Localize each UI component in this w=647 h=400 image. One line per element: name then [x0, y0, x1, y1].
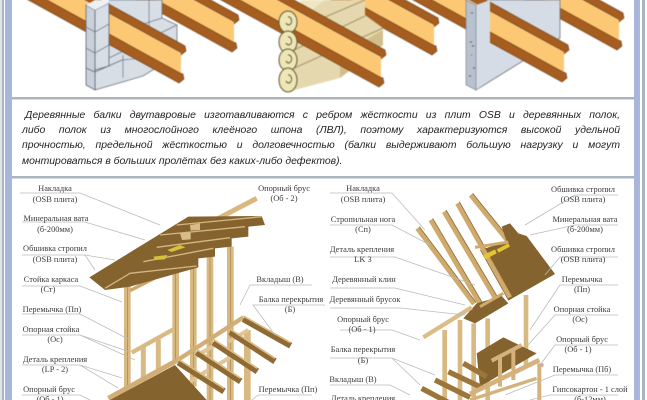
insulation [483, 243, 510, 259]
eave panel [463, 296, 508, 323]
labels: right view, right column: (Ос) [572, 315, 588, 324]
floor sheathing [110, 365, 207, 400]
labels: left view, left column: Накладка [38, 184, 72, 193]
log wall [287, 0, 383, 92]
labels: right view, right column: (Пп) [574, 285, 590, 294]
labels: right view, left column [329, 184, 401, 400]
labels: left view, left column: Минеральная вата [23, 214, 89, 223]
roof sheathing [480, 223, 555, 301]
labels: right view, right column: (б-200мм) [567, 225, 603, 234]
labels: right view, right column: (OSB плита) [561, 195, 606, 204]
floor plates [108, 317, 243, 398]
labels: left view, right column: (Об - 2) [270, 194, 298, 203]
beam through concrete wall [268, 0, 569, 82]
labels: left view, left column [23, 184, 89, 400]
beam behind logs [138, 0, 439, 55]
lower joists [422, 363, 487, 400]
wall posts [445, 295, 526, 400]
labels: left view, right column: Вкладыш (В) [256, 275, 304, 284]
labels: right view, left column: Стропильная нога [331, 215, 396, 224]
labels: left view, left column: (Ос) [47, 335, 63, 344]
beam through block wall [0, 0, 186, 83]
labels: right view, left column: (OSB плита) [341, 195, 386, 204]
upper floor sheathing [477, 337, 537, 387]
labels: left view, right column: Балка перекрытия [259, 295, 323, 304]
labels: left view, right column: Перемычка (Пп) [259, 385, 318, 394]
labels: left view, right column: (Б) [285, 305, 295, 314]
labels: right view, left column: Деревянный клин [332, 275, 396, 284]
labels: left view, left column: (LP - 2) [42, 365, 68, 374]
rafters behind the sheathing [417, 195, 508, 314]
labels: right view, right column: Перемычка (Пб) [553, 365, 611, 374]
log ends [279, 11, 297, 92]
diagram: frame house, right view [417, 193, 555, 400]
labels: left view, right column: Опорный брус [258, 184, 310, 193]
ridge beam [217, 198, 257, 219]
labels: right view, right column [551, 185, 628, 400]
text block: description of I-beams: прочностью, предельной жёсткостью и долговечностью (балки выдерживают большую нагрузку и могут [22, 140, 620, 151]
labels: right view, right column: (OSB плита) [561, 255, 606, 264]
labels: right view, right column: (Об - 1) [564, 345, 592, 354]
text block: description of I-beams: Деревянные балки двутавровые изготавливаются с ребром жёсткости из плит OSB и деревянных полок, [25, 110, 620, 121]
diagram: frame house, left view [89, 198, 291, 400]
leader lines [20, 193, 618, 400]
batten [475, 242, 508, 307]
wall posts [127, 247, 247, 400]
labels: right view, left column: Деталь крепления [330, 245, 394, 254]
labels: right view, left column: Вкладыш (В) [329, 375, 377, 384]
roof sheathing and rafters [89, 216, 265, 290]
beam behind block wall [0, 0, 239, 52]
concrete wall [476, 0, 560, 90]
labels: right view, left column: (Сп) [355, 225, 371, 234]
labels: right view, left column: Опорный брус [337, 315, 389, 324]
block wall [95, 0, 177, 90]
labels: left view, left column: Опорный брус [23, 385, 75, 394]
joist blocking [190, 330, 248, 382]
labels: right view, right column: Минеральная вата [552, 215, 618, 224]
labels: left view, left column: Опорная стойка [23, 325, 80, 334]
edge rafter [457, 202, 512, 297]
labels: left view, right column [256, 184, 323, 394]
top plate [130, 270, 171, 291]
labels: right view, left column: (Б) [358, 356, 368, 365]
labels: left view, left column: (б-200мм) [37, 225, 73, 234]
labels: right view, right column: Опорная стойка [554, 305, 611, 314]
labels: left view, left column: (OSB плита) [33, 195, 78, 204]
beam in front of logs [85, 0, 386, 87]
labels: right view, right column: Перемычка [562, 275, 603, 284]
labels: left view, left column: Перемычка (Пп) [23, 305, 82, 314]
text block: description of I-beams: монтироваться в больших пролётах без каких-либо дефектов). [22, 156, 342, 167]
labels: right view, left column: Накладка [346, 184, 380, 193]
labels: right view, left column: Деревянный брусок [330, 295, 401, 304]
labels: right view, right column: Обшивка стропил [551, 245, 615, 254]
concrete column [466, 0, 490, 90]
labels: left view, left column: Деталь крепления [23, 355, 87, 364]
beam behind concrete column [323, 0, 624, 50]
illustration: I-beams on block, log and concrete walls [0, 0, 624, 92]
block column [86, 0, 122, 90]
window rails [132, 329, 173, 382]
labels: right view, right column: Опорный брус [556, 335, 608, 344]
support beam [423, 307, 472, 337]
labels: right view, left column: LK 3 [354, 255, 372, 264]
labels: left view, left column: Стойка каркаса [24, 275, 79, 284]
labels: right view, right column: Гипсокартон - 1 слой [552, 385, 628, 394]
text block: description of I-beams: либо полок из многослойного клеёного шпона (ЛВЛ), поэтому характеризуются высокой удельной [22, 125, 620, 136]
labels: left view, left column: (OSB плита) [33, 255, 78, 264]
node [540, 363, 544, 367]
labels: right view, left column: Балка перекрытия [331, 345, 395, 354]
joists [178, 316, 291, 391]
labels: left view, left column: Обшивка стропил [23, 244, 87, 253]
rails [470, 345, 539, 400]
text block: description of I-beams [22, 110, 620, 167]
labels: right view, right column: Обшивка стропил [551, 185, 615, 194]
labels: left view, left column: (Ст) [41, 285, 56, 294]
labels: right view, left column: (Об - 1) [348, 325, 376, 334]
